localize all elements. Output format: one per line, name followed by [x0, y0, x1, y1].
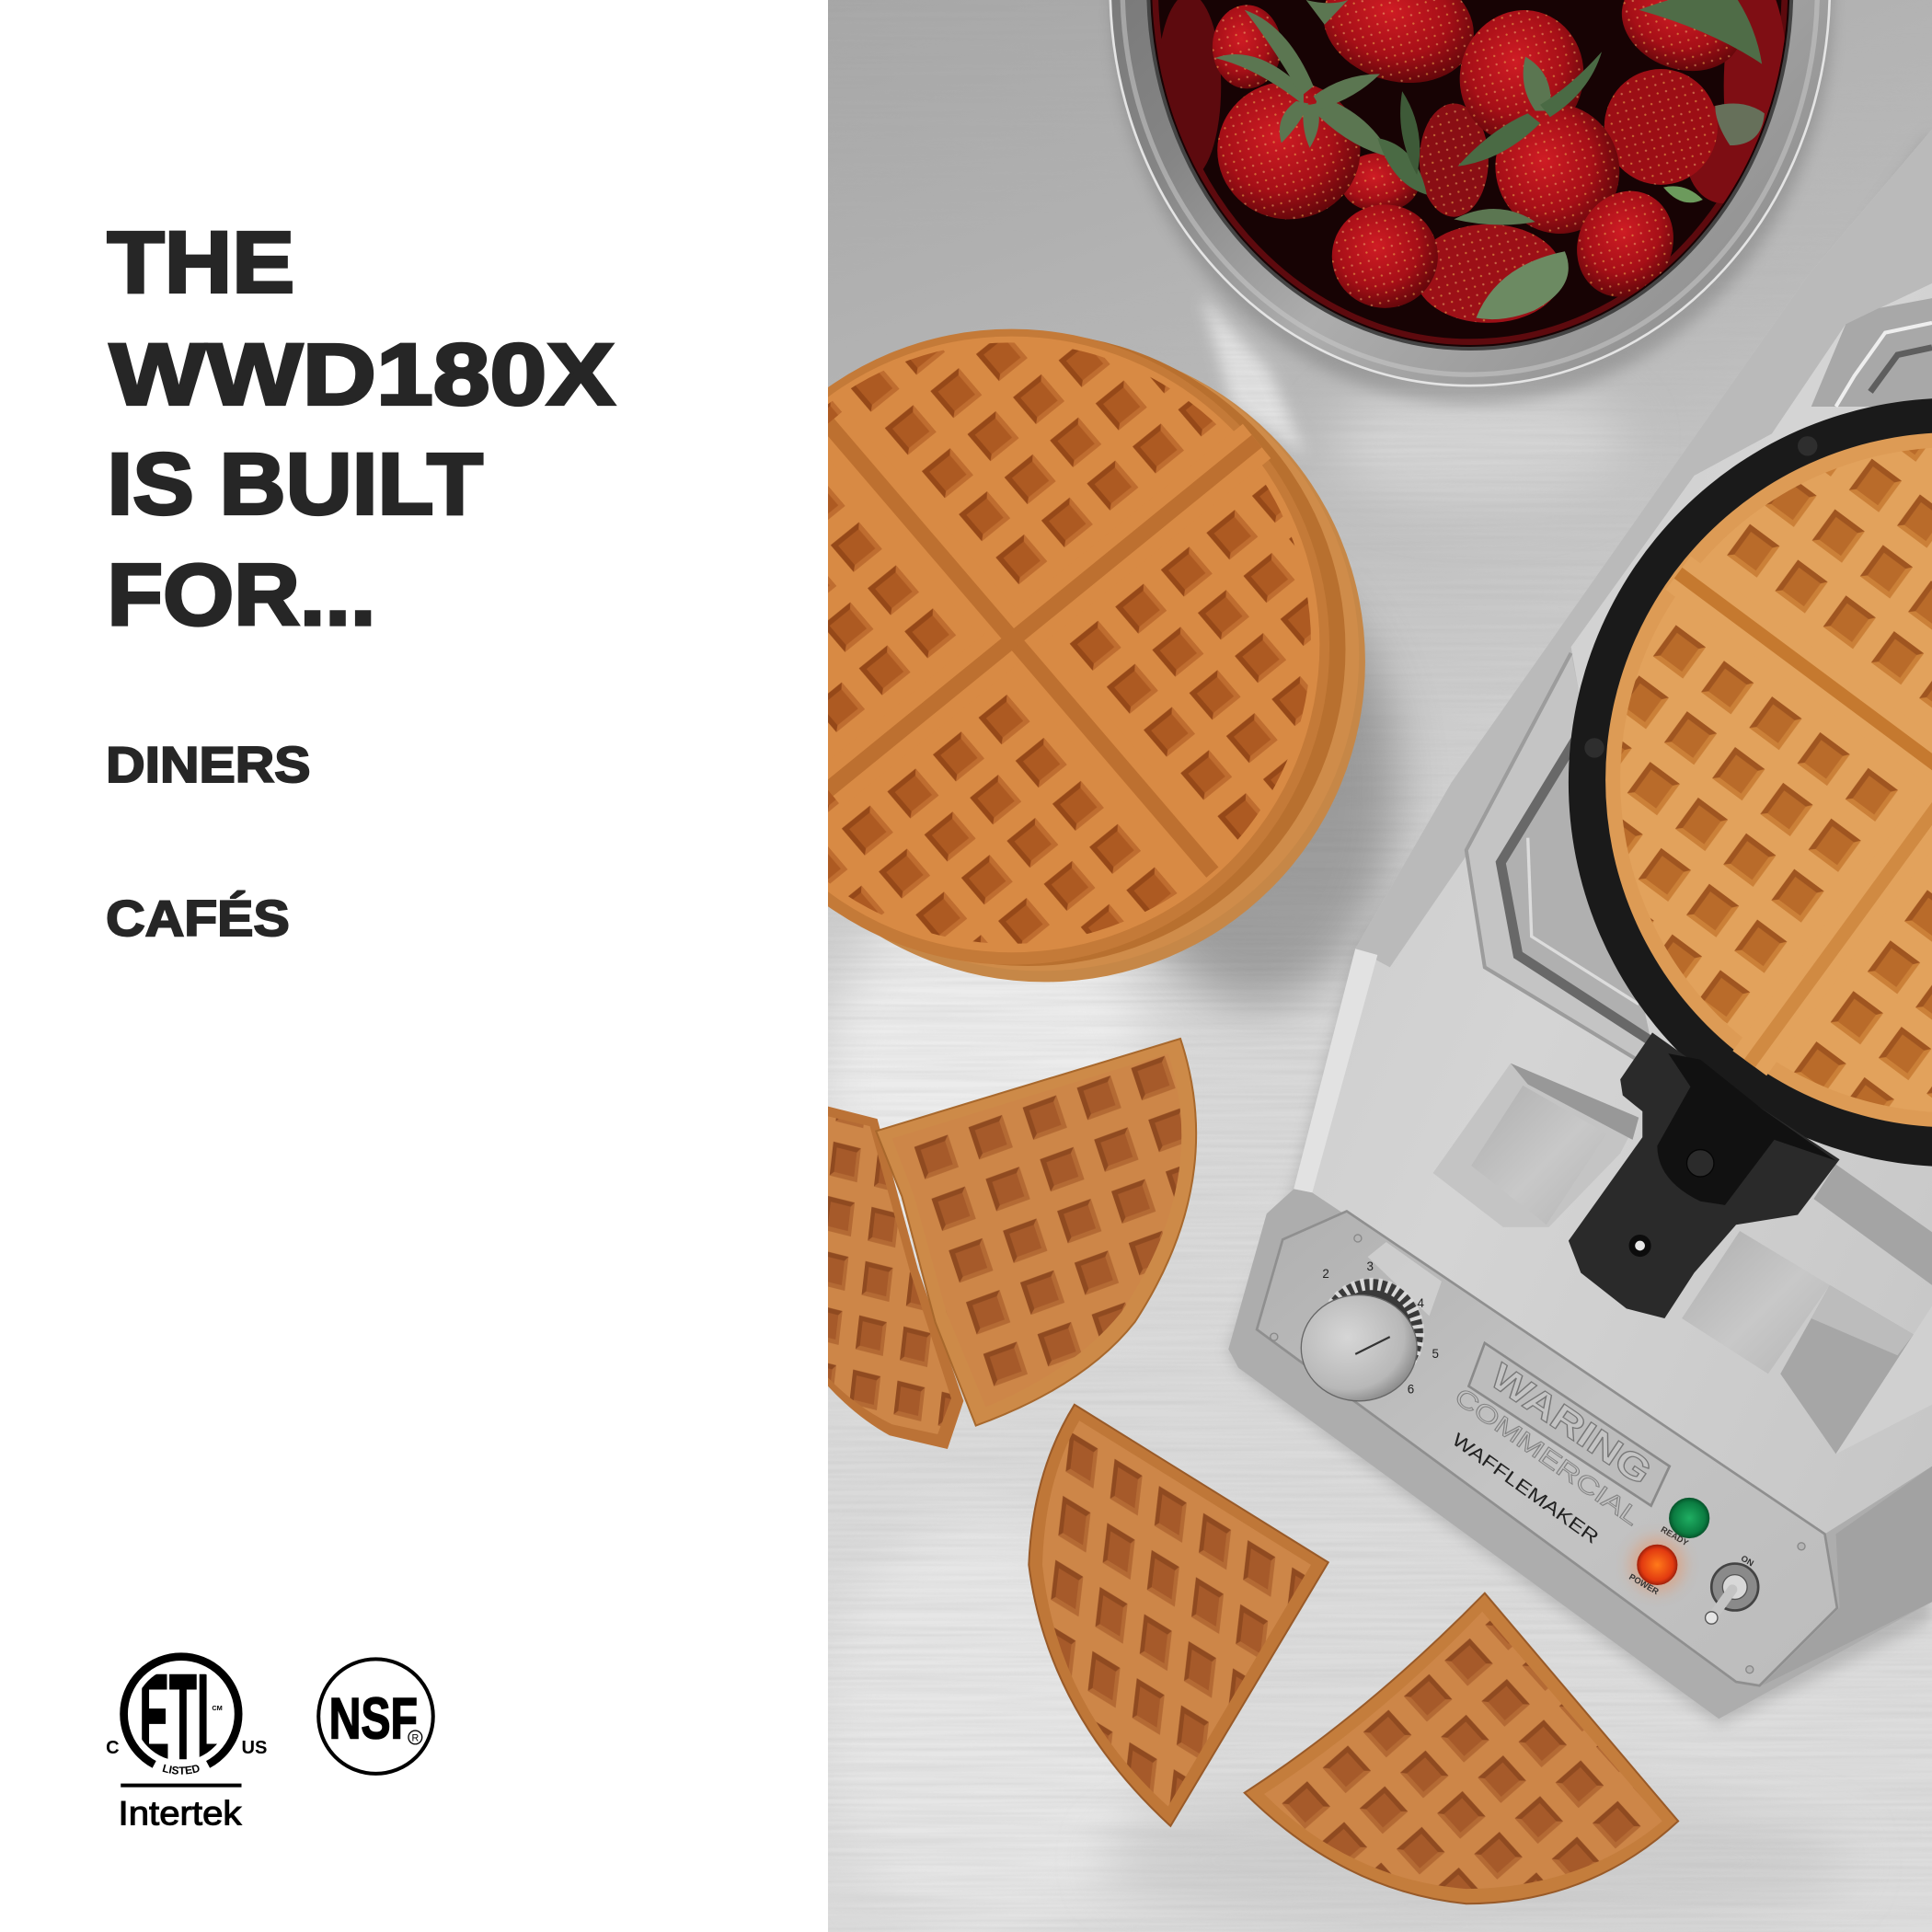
- logo: NSF: NSF: [329, 1687, 418, 1752]
- temperature dial: 6: [1408, 1383, 1414, 1397]
- waffle maker body: [1228, 130, 1932, 1725]
- title: WWD180X: [109, 327, 615, 423]
- logo: ETL listed Intertek: US: [241, 1738, 267, 1758]
- left white panel: [0, 0, 828, 1932]
- indicator: power: [1627, 1537, 1685, 1596]
- logo: ETL listed Intertek: C: [106, 1738, 120, 1758]
- title: FOR...: [108, 547, 375, 644]
- logo: ETL listed Intertek: Intertek: [119, 1793, 242, 1832]
- logo: ETL listed Intertek: LISTED: [162, 1765, 200, 1775]
- list item: cafes: CAFÉS: [106, 890, 290, 947]
- stainless well corner top right: [1811, 298, 1932, 407]
- lower front face: [1762, 1466, 1932, 1685]
- temperature dial: 2: [1322, 1267, 1329, 1281]
- indicator: ready: READY: [1660, 1524, 1691, 1548]
- logo: ETL listed Intertek: CM: [212, 1704, 223, 1712]
- logo: NSF: R: [411, 1732, 419, 1743]
- handle block right: [1682, 1231, 1830, 1374]
- strawberry leaves: [1215, 0, 1765, 319]
- brand plate: WARING: [1483, 1355, 1660, 1493]
- waffle wedge bottom: [1245, 1593, 1678, 1903]
- model label: WAFFLEMAKER: [1448, 1430, 1602, 1548]
- list item: diners: DINERS: [106, 736, 311, 793]
- handle block left: [1433, 1064, 1639, 1227]
- temperature dial: 4: [1417, 1296, 1424, 1310]
- indicator: power: POWER: [1627, 1572, 1661, 1596]
- toggle switch: ON: [1740, 1554, 1755, 1569]
- textured top rail: [1355, 130, 1932, 967]
- title: [108, 214, 615, 644]
- temperature dial: 5: [1432, 1347, 1439, 1361]
- temperature dial: [1301, 1259, 1439, 1401]
- waffle wedge far left: [828, 1107, 963, 1449]
- logo: ETL listed Intertek: [106, 1652, 267, 1832]
- temperature dial: 3: [1367, 1259, 1374, 1273]
- brand plate: [1450, 1343, 1670, 1531]
- panel: product photo: [828, 0, 1932, 1932]
- title: IS BUILT: [108, 436, 483, 533]
- waffle wedge upper: [876, 1039, 1196, 1426]
- toggle switch: [1706, 1554, 1758, 1624]
- stainless steel background: [825, 0, 1932, 1932]
- stamped steel well: [1466, 653, 1657, 1072]
- title: THE: [108, 214, 294, 311]
- logo: ETL listed Intertek: ETL: [139, 1649, 224, 1784]
- black hinge bracket: [1569, 1032, 1840, 1318]
- control plate: [1257, 1212, 1837, 1685]
- large waffle stack: [828, 329, 1422, 1026]
- logo: NSF: [318, 1659, 433, 1774]
- waffle wedge lower middle: [1029, 1405, 1328, 1826]
- waffle in the machine plate: [1569, 398, 1932, 1167]
- stainless rail behind right block: [1813, 1165, 1932, 1285]
- strawberry bowl: [1110, 0, 1833, 404]
- strawberries: [1158, 0, 1785, 323]
- indicator: ready: [1660, 1499, 1709, 1548]
- brand plate: COMMERCIAL: [1450, 1383, 1645, 1531]
